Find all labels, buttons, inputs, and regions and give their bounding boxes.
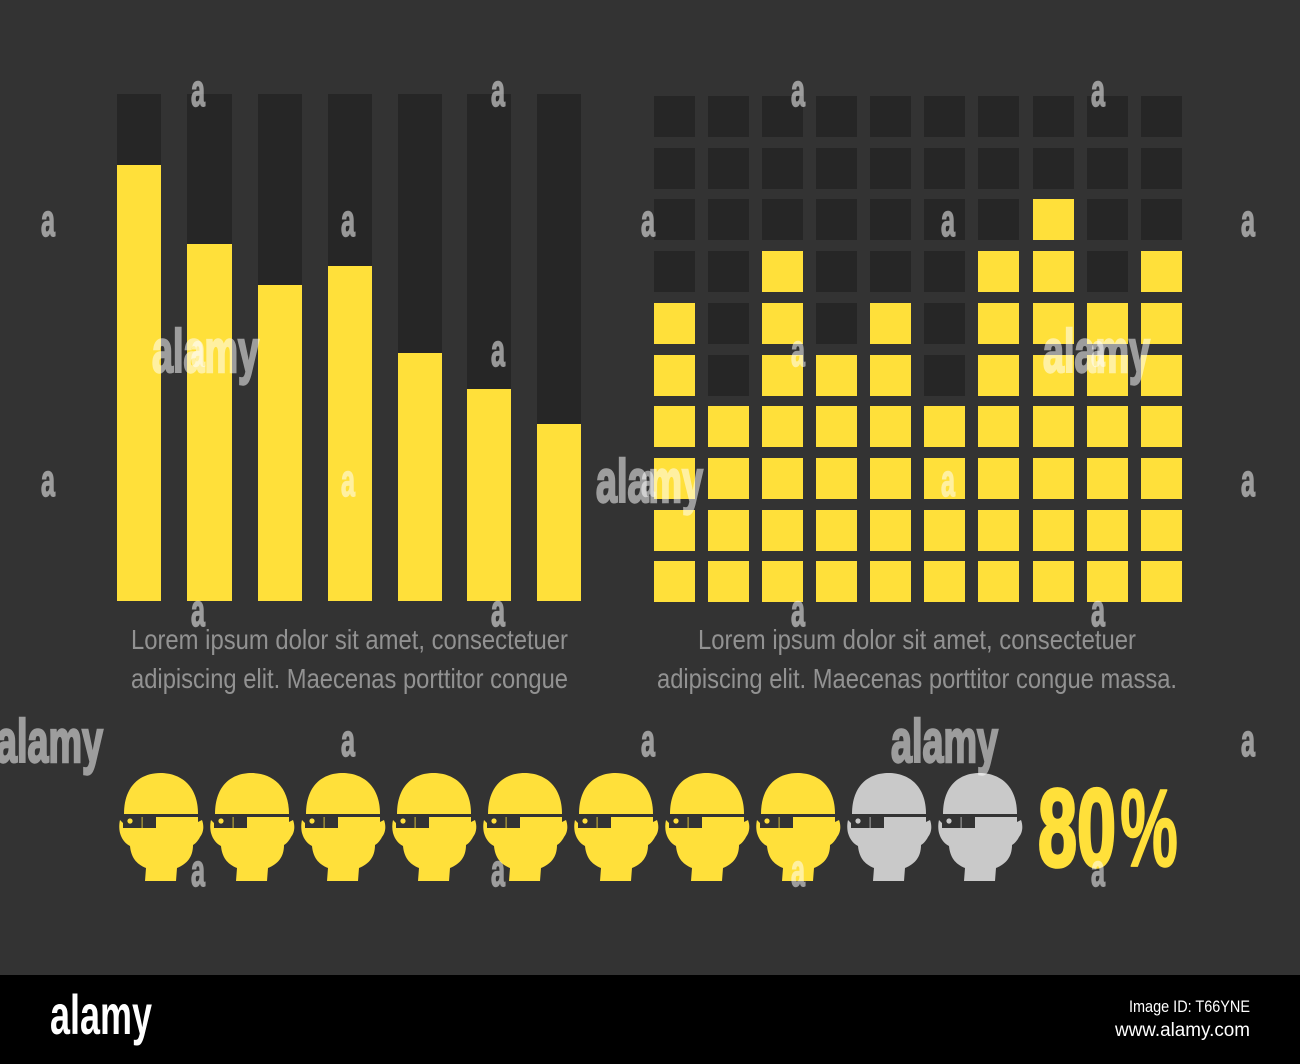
watermark letters: a [941,195,956,246]
watermark words: alamy [0,708,103,775]
website: www.alamy.com [1114,1020,1250,1041]
watermark letters: a [641,195,656,246]
watermark words: alamy [1043,318,1150,385]
watermark letters: a [791,325,806,376]
watermark words: alamy [596,448,703,515]
text block: right caption [657,624,1177,694]
icon: head with glasses 5 [483,773,567,881]
watermark letters: a [191,325,206,376]
text block: right caption: Lorem ipsum dolor sit amet, consectetuer [698,624,1136,655]
icon: head with glasses 6 [574,773,658,881]
square grid chart [654,96,1182,602]
percentage label: 80 [1038,767,1116,890]
watermark letters: a [191,845,206,896]
icon: head with glasses 4 [392,773,476,881]
icon: head with glasses 10, grey [938,773,1022,881]
people pictogram row [119,773,1022,881]
footer bar [0,975,1300,1064]
watermark letters: a [791,845,806,896]
icon: head with glasses 1 [119,773,203,881]
icon: head with glasses 3 [301,773,385,881]
text block: left caption: Lorem ipsum dolor sit amet, consectetuer [131,624,568,655]
watermark letters [41,65,1256,896]
watermark letters: a [1091,65,1106,116]
watermark letters: a [941,455,956,506]
watermark letters: a [341,715,356,766]
watermark words: alamy [152,318,259,385]
watermark letters: a [491,845,506,896]
yellow squares [654,199,1182,602]
watermark letters: a [491,325,506,376]
watermark letters: a [341,195,356,246]
watermark words [0,318,1150,775]
watermark letters: a [1241,715,1256,766]
percentage label: % [1120,767,1178,890]
watermark letters: a [191,585,206,636]
watermark letters: a [1241,195,1256,246]
text block: right caption: adipiscing elit. Maecenas porttitor congue massa. [657,663,1177,694]
watermark words: alamy [891,708,998,775]
watermark letters: a [1091,585,1106,636]
watermark letters: a [1091,845,1106,896]
image id: Image ID: T66YNE [1129,997,1250,1016]
text block: left caption [131,624,568,694]
icon: head with glasses 9, grey [847,773,931,881]
footer logo: alamy [50,983,152,1046]
watermark letters: a [41,195,56,246]
watermark letters: a [641,715,656,766]
watermark letters: a [491,65,506,116]
icon: head with glasses 7 [665,773,749,881]
text block: left caption: adipiscing elit. Maecenas porttitor congue [131,663,568,694]
bar chart [117,94,581,601]
watermark letters: a [191,65,206,116]
icon: head with glasses 2 [210,773,294,881]
watermark letters: a [1241,455,1256,506]
watermark letters: a [641,455,656,506]
watermark letters: a [791,65,806,116]
watermark letters: a [41,455,56,506]
icon: head with glasses 8 [756,773,840,881]
dark squares [654,96,1182,396]
watermark letters: a [341,455,356,506]
watermark letters: a [791,585,806,636]
watermark letters: a [1091,325,1106,376]
watermark letters: a [491,585,506,636]
